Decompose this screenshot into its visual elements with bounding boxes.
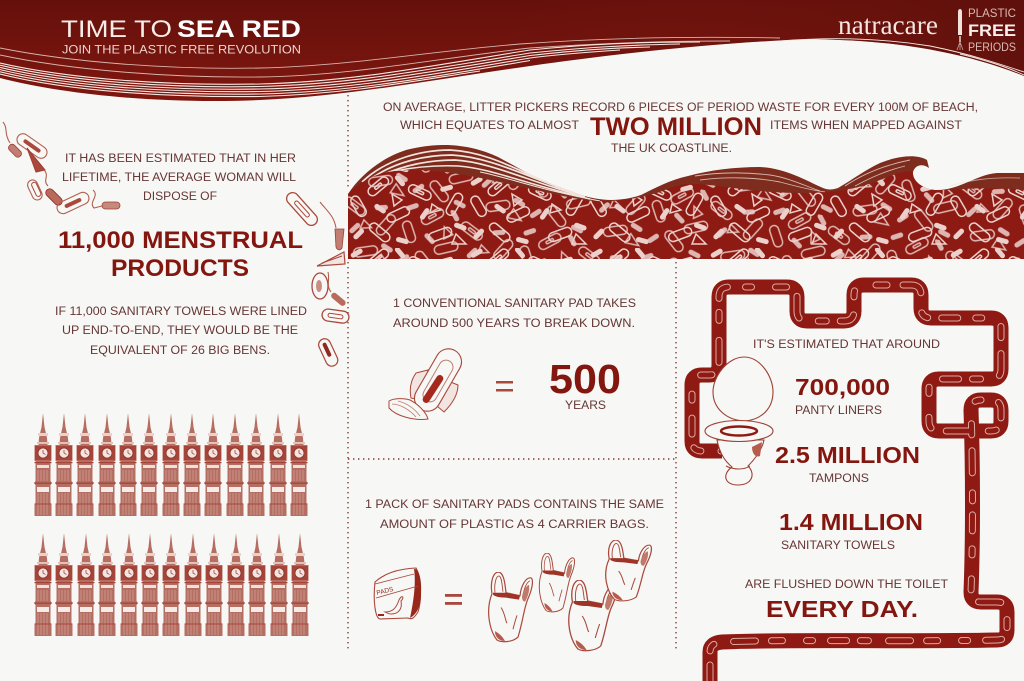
icon: sanitary pad — [389, 344, 466, 419]
panel: lifetime disposal text — [55, 151, 307, 357]
panel: pack equals carrier bags: AMOUNT OF PLASTIC AS 4 CARRIER BAGS. — [380, 517, 649, 531]
stat: 11,000 menstrual products — [58, 227, 303, 282]
panel: pack equals carrier bags — [365, 497, 664, 651]
text: beach litter statistic: TWO MILLION — [590, 113, 762, 141]
text: beach litter statistic: ITEMS WHEN MAPPED AGAINST — [770, 118, 962, 132]
panel: lifetime disposal text: UP END-TO-END, THEY WOULD BE THE — [62, 323, 298, 337]
icon: equals sign — [496, 381, 513, 392]
icon: equals sign — [445, 594, 462, 605]
logo: plastic free periods: FREE — [968, 21, 1016, 40]
panel: pack equals carrier bags: 1 PACK OF SANITARY PADS CONTAINS THE SAME — [365, 497, 664, 511]
icon: toilet — [705, 357, 773, 485]
stat: panty liners: 700,000 — [795, 374, 890, 400]
stat: tampons: 2.5 MILLION — [775, 442, 920, 468]
illustration: pipe filled with products — [692, 285, 1007, 681]
stat: every day: EVERY DAY. — [766, 596, 918, 622]
title — [61, 16, 301, 43]
logo: plastic free periods: PERIODS — [968, 40, 1016, 54]
stat: sanitary towels — [779, 509, 923, 552]
icon: pack of pads: PADS — [376, 586, 395, 597]
panel: flushed products: ARE FLUSHED DOWN THE TOILET — [745, 577, 948, 591]
panel: lifetime disposal text: IT HAS BEEN ESTIMATED THAT IN HER — [65, 151, 296, 165]
text: beach litter statistic: WHICH EQUATES TO ALMOST — [400, 118, 579, 132]
panel: flushed products — [745, 337, 948, 622]
text: beach litter statistic — [383, 100, 978, 155]
text: beach litter statistic: ON AVERAGE, LITTER PICKERS RECORD 6 PIECES OF PERIOD WASTE FOR EVERY 100M OF BEACH, — [383, 100, 978, 114]
stat: tampons: TAMPONS — [809, 471, 869, 485]
subtitle: JOIN THE PLASTIC FREE REVOLUTION — [62, 42, 301, 56]
panel: lifetime disposal text: EQUIVALENT OF 26 BIG BENS. — [90, 343, 270, 357]
logo: natracare: natracare — [838, 10, 938, 40]
text: beach litter statistic: THE UK COASTLINE. — [611, 141, 732, 155]
panel: lifetime disposal text: DISPOSE OF — [143, 189, 217, 203]
icons: scattered products top left — [3, 122, 120, 216]
icon: pack of pads — [374, 568, 421, 619]
icons: four carrier bags — [489, 540, 651, 651]
stat: panty liners: PANTY LINERS — [795, 403, 882, 417]
stat: tampons — [775, 442, 920, 485]
stat: 500 years: YEARS — [565, 398, 606, 412]
panel: 500 years: 1 CONVENTIONAL SANITARY PAD TAKES — [393, 296, 636, 310]
icons: scattered products right of text — [284, 190, 350, 368]
title: TIME TO — [61, 16, 172, 43]
chart: 26 big bens row 2 — [34, 533, 309, 636]
stat: 11,000 menstrual products: 11,000 MENSTRUAL — [58, 227, 303, 254]
illustration: wave of period waste — [348, 145, 1024, 259]
panel: flushed products: IT'S ESTIMATED THAT AROUND — [753, 337, 940, 351]
panel: lifetime disposal text: IF 11,000 SANITARY TOWELS WERE LINED — [55, 304, 307, 318]
logo: plastic free periods — [957, 6, 1016, 54]
stat: sanitary towels: 1.4 MILLION — [779, 509, 923, 535]
header banner — [0, 0, 1024, 101]
dotted dividers — [348, 95, 676, 650]
logo: plastic free periods: PLASTIC — [968, 6, 1016, 20]
panel: lifetime disposal text: LIFETIME, THE AVERAGE WOMAN WILL — [62, 170, 296, 184]
panel: 500 years: AROUND 500 YEARS TO BREAK DOWN. — [393, 316, 635, 330]
stat: 11,000 menstrual products: PRODUCTS — [111, 255, 249, 282]
panel: 500 years — [389, 296, 636, 419]
chart: 26 big bens row 1 — [34, 413, 308, 516]
title: SEA RED — [177, 16, 301, 43]
stat: sanitary towels: SANITARY TOWELS — [781, 538, 895, 552]
stat: 500 years: 500 — [549, 356, 621, 402]
stat: panty liners — [795, 374, 890, 417]
